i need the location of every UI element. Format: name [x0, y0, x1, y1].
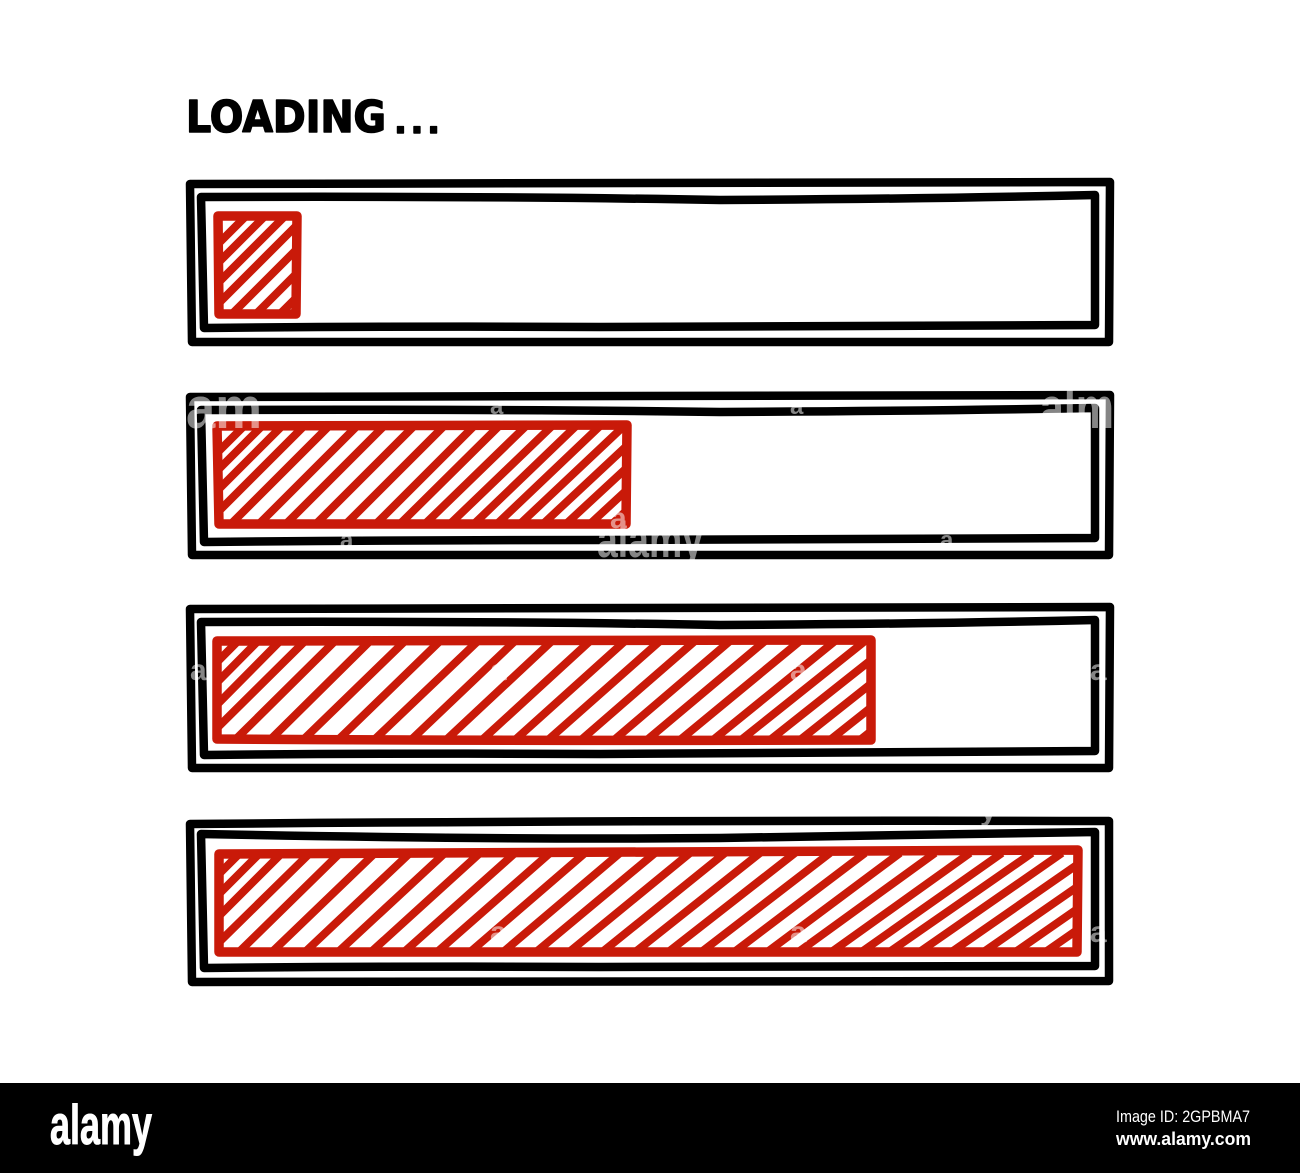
watermark fragments: a — [490, 393, 504, 420]
panel: progress bar 4 — [140, 821, 1188, 982]
image id: Image ID: 2GPBMA7 — [1116, 1107, 1250, 1126]
bar 4 inner frame — [201, 832, 1095, 968]
watermark fragments: a — [490, 916, 507, 949]
panel: progress bar 2 — [146, 395, 1110, 555]
bar 4 red fill outline — [219, 850, 1078, 952]
bar 1 inner frame — [201, 195, 1095, 328]
bar 2 inner frame — [201, 408, 1095, 542]
bar 3 hatching — [222, 644, 866, 736]
watermark fragments: a — [1090, 916, 1107, 949]
bar 3 outer frame — [190, 607, 1110, 768]
website: www.alamy.com — [1115, 1129, 1251, 1149]
footer logo: alamy — [50, 1093, 152, 1156]
bar 3 red fill outline — [217, 640, 871, 740]
panel: progress bar 3 — [140, 607, 1110, 768]
bar 2 hatching — [222, 430, 622, 520]
bar 4 hatching — [224, 854, 1074, 948]
watermark fragments: a — [940, 527, 954, 554]
bar 2 red fill outline — [217, 425, 627, 524]
watermark fragments: a — [790, 654, 807, 687]
footer band — [0, 1083, 1300, 1173]
watermark fragments: am — [186, 376, 262, 441]
watermark fragments: a — [790, 916, 807, 949]
watermark fragments: a — [610, 502, 627, 535]
watermark fragments — [186, 376, 1114, 949]
bar 1 red fill outline — [218, 216, 297, 314]
watermark fragments: y — [980, 794, 997, 827]
bar 4 outer frame — [190, 821, 1109, 982]
watermark fragments: a — [1090, 654, 1107, 687]
bar 3 inner frame — [201, 620, 1095, 755]
title: ... — [394, 102, 440, 142]
watermark fragments: alamy — [597, 512, 703, 568]
bar 1 hatching — [222, 220, 292, 310]
bar 2 outer frame — [190, 395, 1110, 555]
watermark fragments: a — [790, 393, 804, 420]
watermark fragments: alm — [1040, 376, 1114, 441]
watermark fragments: a — [490, 654, 507, 687]
title: LOADING — [186, 92, 386, 143]
bar 1 outer frame — [190, 182, 1110, 342]
watermark fragments: a — [190, 654, 207, 687]
watermark fragments: a — [340, 527, 354, 554]
panel: progress bar 1 — [147, 182, 1110, 342]
